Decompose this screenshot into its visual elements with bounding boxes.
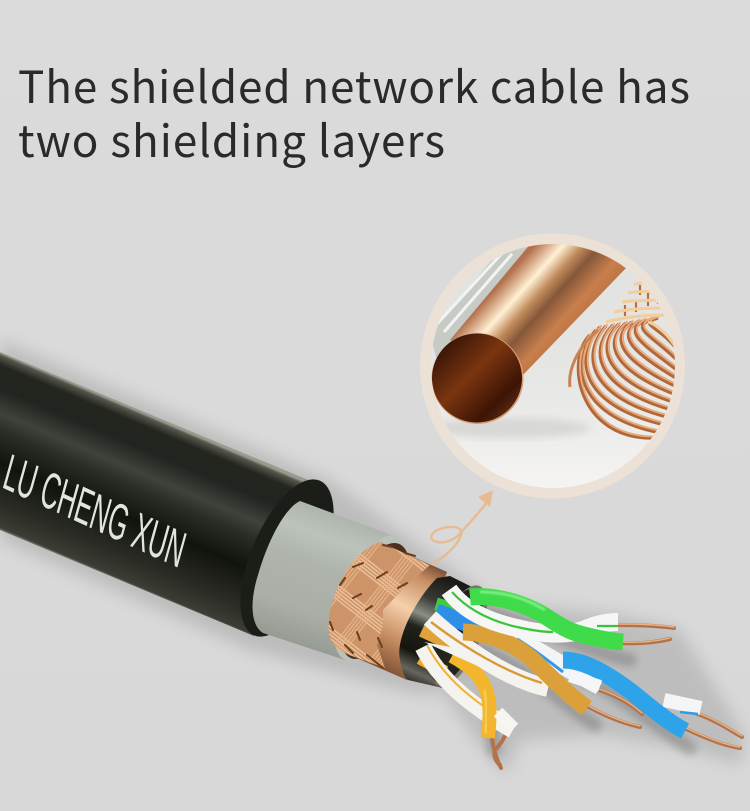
copper braided shield [328, 542, 447, 680]
solid blue wire [563, 660, 685, 731]
solid yellow wire [452, 656, 490, 738]
solid orange wire [463, 632, 587, 708]
twisted wire pairs [420, 590, 701, 738]
white end of yellow pair [498, 712, 514, 728]
circle frame [420, 234, 685, 498]
white end of blue-white wire [570, 676, 600, 686]
foil shield ring [399, 576, 499, 694]
copper wire coil [570, 282, 681, 438]
loop arrow to detail circle [431, 490, 493, 564]
cable brand text: LU CHENG XUN [0, 442, 192, 579]
black outer jacket [0, 352, 353, 649]
grey inner sheath [253, 501, 424, 671]
copper foil tube [432, 244, 626, 424]
blue-white wire [436, 612, 701, 714]
green-white wire [449, 590, 618, 634]
title: two shielding layers [18, 106, 445, 170]
wire shadows [480, 612, 690, 750]
yellow-white wire [423, 645, 513, 730]
title [18, 52, 690, 170]
cable drop shadow [0, 340, 745, 775]
orange-white wire [430, 618, 548, 688]
title: The shielded network cable has [18, 52, 690, 116]
inner green and orange wire starts [420, 604, 470, 672]
flat white sliver [424, 642, 546, 690]
solid green wire [470, 592, 623, 642]
detail circle: shielding materials [420, 234, 685, 498]
copper wire tips [492, 624, 742, 768]
circle photo [430, 236, 681, 490]
